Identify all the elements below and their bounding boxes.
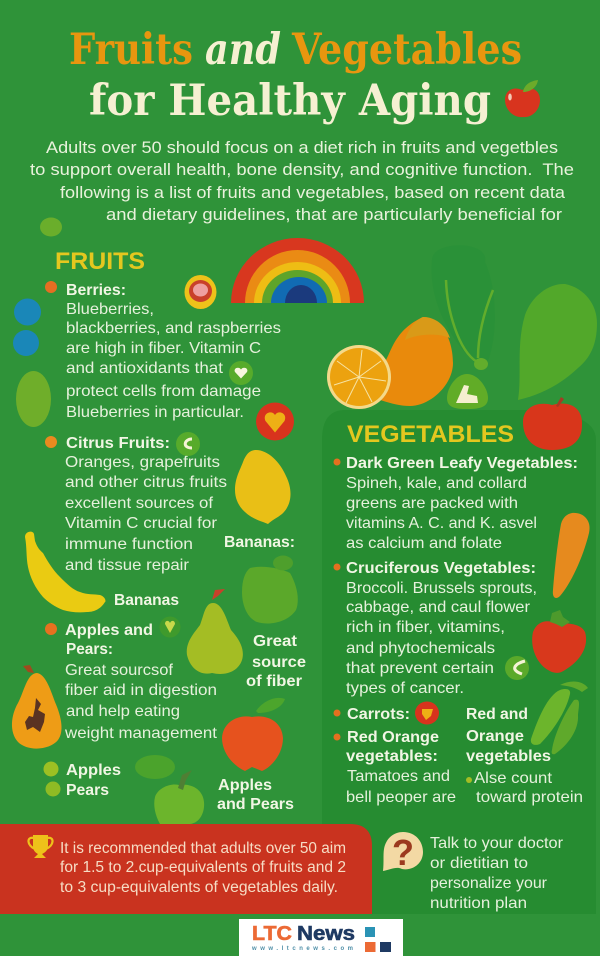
icon: lemon <box>235 450 291 524</box>
bullet list: cruciferous vegetables: Cruciferous Vegetables: <box>346 560 536 577</box>
bullet list: berries: and antioxidants that <box>66 360 224 377</box>
callout: talk to your doctor: Talk to your doctor <box>430 835 564 852</box>
label: bananas lower: Bananas <box>114 592 179 609</box>
bullet list: dark green leafy vegetables: as calcium and folate <box>346 535 502 552</box>
icon: blueberries <box>13 298 41 356</box>
bullet list: red and orange vegetables: toward protein <box>476 789 583 806</box>
bullet list: berries: Berries: <box>66 282 126 299</box>
icon: green apple bottom <box>135 755 204 824</box>
label: great source of fiber: of fiber <box>246 673 302 690</box>
bullet list: red and orange vegetables: Alse count <box>474 770 553 787</box>
bullet list: citrus fruits <box>45 435 227 574</box>
callout: talk to your doctor: personalize your <box>430 875 548 892</box>
icon: green heart badge <box>229 361 253 385</box>
title <box>69 25 522 126</box>
bullet list: cruciferous vegetables <box>334 560 537 697</box>
icon: question speech bubble <box>383 832 423 873</box>
icon: green apple with leaf <box>242 556 298 624</box>
bullet list: dark green leafy vegetables: vitamins A. C. and K. asvel <box>346 515 537 532</box>
bullet list: carrots and red orange vegetables: Carrots: <box>347 706 410 723</box>
heading: vegetables: VEGETABLES <box>347 421 514 448</box>
bullet list: berries: Blueberries in particular. <box>66 404 244 421</box>
bullet list: apples and pears: Great sourcsof <box>65 662 174 679</box>
intro paragraph: Adults over 50 should focus on a diet rich in fruits and vegetbles <box>46 138 558 157</box>
bullet list: citrus fruits: Oranges, grapefruits <box>65 454 220 471</box>
recommendation text <box>60 840 346 896</box>
bullet list: apples and pears <box>45 622 218 742</box>
intro paragraph <box>30 138 574 224</box>
bullet list: carrots and red orange vegetables <box>334 706 456 806</box>
decoration: green smudge <box>40 218 62 236</box>
icon: red apple <box>523 397 582 450</box>
logo: LTC News: www.ltcnews.com <box>251 946 353 952</box>
bullet list: apples and pears: Apples and <box>65 622 153 639</box>
icon: trophy <box>28 835 53 858</box>
bullet list: red and orange vegetables: Red and <box>466 706 528 723</box>
icon: yellow-green pear <box>187 589 243 674</box>
bullet list: berries: protect cells from damage <box>66 383 261 400</box>
bullet list: cruciferous vegetables: and phytochemicals <box>346 640 495 657</box>
bullet list: red and orange vegetables: vegetables <box>466 748 551 765</box>
bullet list: berries: blackberries, and raspberries <box>66 320 281 337</box>
bullet list: cruciferous vegetables: rich in fiber, vitamins, <box>346 619 505 636</box>
label: apples and pears list: Pears <box>66 782 109 799</box>
bullet list: citrus fruits: immune function <box>65 536 193 553</box>
bullet list: apples and pears: weight management <box>64 725 218 742</box>
callout: talk to your doctor: or dietitian to <box>430 855 528 872</box>
bullet list: dark green leafy vegetables: greens are packed with <box>346 495 518 512</box>
bullet list: citrus fruits: and tissue repair <box>65 557 190 574</box>
icon: red apple in title <box>505 80 540 117</box>
title: and <box>205 25 281 75</box>
panel: collard leaf illustration <box>432 245 597 400</box>
icon: pea pods <box>531 682 588 754</box>
icon: apple heart badge <box>160 616 180 638</box>
bullet list: apples and pears: Pears: <box>66 641 113 658</box>
bullet list: apples and pears: fiber aid in digestion <box>65 682 217 699</box>
icon: tomato <box>532 610 586 673</box>
heading: fruits: FRUITS <box>55 248 145 275</box>
label: apples and pears: and Pears <box>217 796 294 813</box>
label: apples and pears: Apples <box>218 777 272 794</box>
icon: question speech bubble: ? <box>392 832 414 873</box>
label: great source of fiber: source <box>252 654 306 671</box>
bullet list: cruciferous vegetables: Broccoli. Brussels sprouts, <box>346 580 537 597</box>
icon: orange pear <box>12 665 62 749</box>
recommendation text: to 3 cup-equivalents of vegetables daily. <box>60 879 338 896</box>
bullet list: carrots and red orange vegetables: Red Orange <box>347 729 439 746</box>
label: apples and pears <box>217 777 294 813</box>
bullet list: dark green leafy vegetables: Dark Green Leafy Vegetables: <box>346 455 578 472</box>
label: great source of fiber: Great <box>253 633 298 650</box>
panel: daily recommendation <box>0 824 372 914</box>
bullet list: cruciferous vegetables: types of cancer. <box>346 680 464 697</box>
bullet list: carrots and red orange vegetables: bell peoper are <box>346 789 456 806</box>
label: apples and pears list <box>44 762 121 799</box>
icon: mango <box>380 317 453 406</box>
recommendation text: for 1.5 to 2.cup-equivalents of fruits and 2 <box>60 859 346 876</box>
bullet list: dark green leafy vegetables: Spineh, kale, and collard <box>346 475 527 492</box>
bullet list: cruciferous vegetables: that prevent certain <box>346 660 494 677</box>
icon: avocado <box>16 371 51 427</box>
icon: vitamin C badge <box>176 432 200 456</box>
bullet list: berries <box>45 281 281 421</box>
icon: orange slice <box>327 345 391 409</box>
callout: talk to your doctor <box>430 835 564 912</box>
footer band <box>0 914 600 956</box>
intro paragraph: to support overall health, bone density, and cognitive function. The <box>30 160 574 179</box>
bullet list: citrus fruits: Citrus Fruits: <box>66 435 170 452</box>
panel: vegetables background <box>322 410 596 914</box>
title: Vegetables <box>291 25 522 75</box>
bullet list: citrus fruits: excellent sources of <box>65 495 214 512</box>
icon: red heart badge <box>256 402 294 440</box>
icon: carrot <box>553 513 590 598</box>
intro paragraph: following is a list of fruits and vegetables, based on recent data <box>60 183 566 202</box>
bullet list: cruciferous vegetables: cabbage, and caul flower <box>346 599 531 616</box>
callout: talk to your doctor: nutrition plan <box>430 895 527 912</box>
title: Fruits <box>69 25 193 75</box>
bullet list: dark green leafy vegetables <box>334 455 578 552</box>
icon: vitamin C badge vegetables <box>505 656 529 680</box>
icon: carrot badge <box>415 702 439 724</box>
bullet list: red and orange vegetables <box>466 706 583 806</box>
bullet list: carrots and red orange vegetables: Tamatoes and <box>347 768 450 785</box>
icon: rainbow <box>231 238 364 303</box>
icon: banana <box>25 532 105 612</box>
logo: LTC News: LTC <box>252 923 292 945</box>
label: bananas right: Bananas: <box>224 534 295 551</box>
icon: red-orange apple <box>222 698 285 771</box>
intro paragraph: and dietary guidelines, that are particularly beneficial for <box>106 205 562 224</box>
logo: LTC News <box>239 919 403 956</box>
bullet list: apples and pears: and help eating <box>66 703 180 720</box>
bullet list: citrus fruits: and other citrus fruits <box>65 474 227 491</box>
icon: muscle badge <box>447 374 488 409</box>
bullet list: red and orange vegetables: Orange <box>466 728 524 745</box>
title: for Healthy Aging <box>89 76 491 126</box>
recommendation text: It is recommended that adults over 50 aim <box>60 840 346 857</box>
label: apples and pears list: Apples <box>66 762 121 779</box>
label: great source of fiber <box>246 633 306 690</box>
logo: LTC News: News <box>297 923 355 945</box>
bullet list: citrus fruits: Vitamin C crucial for <box>65 515 218 532</box>
icon: brain badge <box>184 275 216 309</box>
bullet list: carrots and red orange vegetables: vegetables: <box>346 748 438 765</box>
bullet list: berries: are high in fiber. Vitamin C <box>66 340 261 357</box>
bullet list: berries: Blueberries, <box>66 301 154 318</box>
